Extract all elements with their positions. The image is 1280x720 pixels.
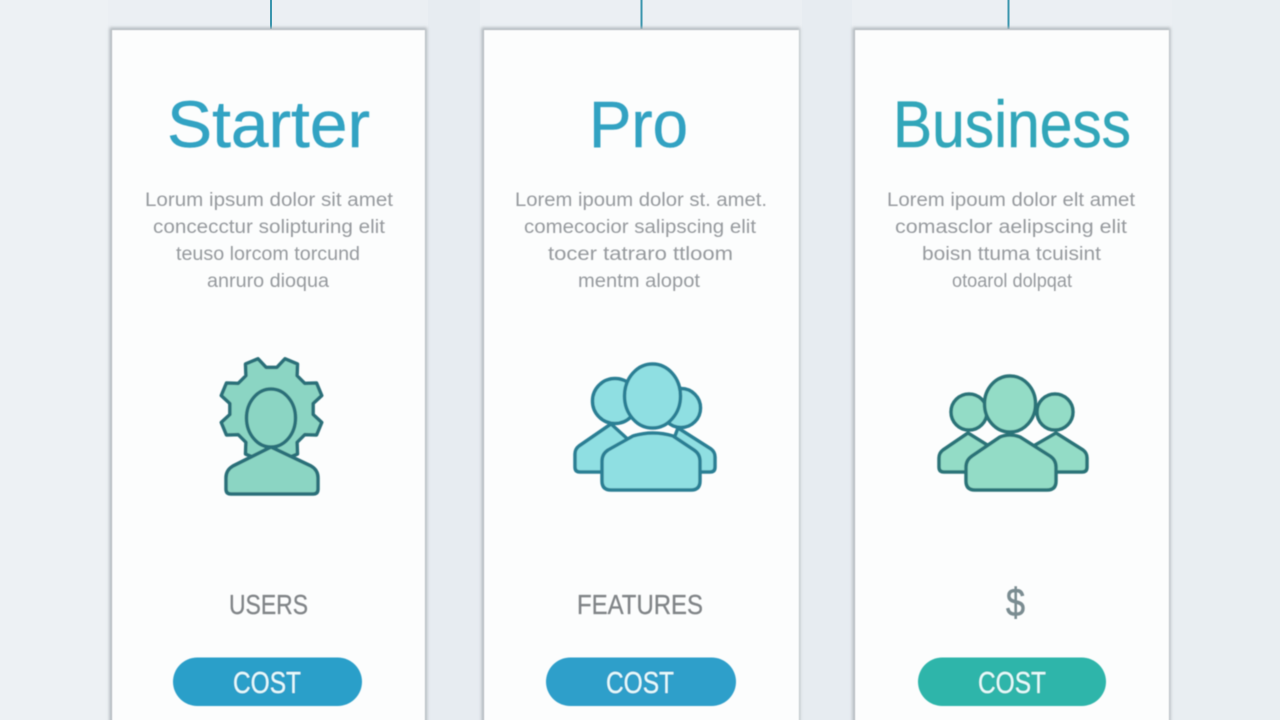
panel: Business [852, 28, 1170, 720]
panel: Starter [110, 28, 427, 720]
text block: Pro description [515, 190, 767, 292]
panel: Pro [482, 28, 800, 720]
text block: Business description: boisn ttuma tcuisint [922, 244, 1102, 265]
text block: Pro description: tocer tatraro ttloom [548, 244, 733, 265]
text block: Business description: comasclor aelipscing elit [895, 217, 1128, 238]
text block: Business description: Lorem ipoum dolor elt amet [887, 190, 1136, 211]
label: USERS: USERS [229, 589, 308, 620]
text block: Starter description: teuso lorcom torcund [176, 244, 360, 265]
text block: Pro description: comecocior salipscing elit [524, 217, 757, 238]
icon: user group [575, 364, 715, 490]
text block: Starter description: concecctur solipturing elit [153, 217, 386, 238]
text block: Starter description: Lorum ipsum dolor sit amet [145, 190, 394, 211]
button: COST [918, 658, 1106, 706]
text block: Starter description: anruro dioqua [207, 271, 329, 292]
connector line: Business [1008, 0, 1010, 29]
heading: Pro: Pro [589, 87, 688, 161]
button: COST [173, 658, 362, 706]
label: dollar sign: $ [1006, 581, 1025, 625]
text block: Starter description [145, 190, 394, 292]
connector line: Pro [640, 0, 642, 29]
button: COST: COST [978, 665, 1046, 700]
button: COST: COST [233, 665, 301, 700]
heading: Business: Business [893, 87, 1131, 161]
heading: Starter: Starter [167, 87, 370, 161]
text block: Business description: otoarol dolpqat [952, 271, 1073, 292]
text block: Business description [887, 190, 1136, 292]
button: COST [546, 658, 736, 706]
label: FEATURES: FEATURES [577, 589, 703, 620]
text block: Pro description: mentm alopot [578, 271, 701, 292]
icon: team of three [939, 376, 1087, 490]
button: COST: COST [606, 665, 674, 700]
icon: gear with person [221, 359, 322, 494]
connector line: Starter [270, 0, 272, 29]
text block: Pro description: Lorem ipoum dolor st. amet. [515, 190, 767, 211]
